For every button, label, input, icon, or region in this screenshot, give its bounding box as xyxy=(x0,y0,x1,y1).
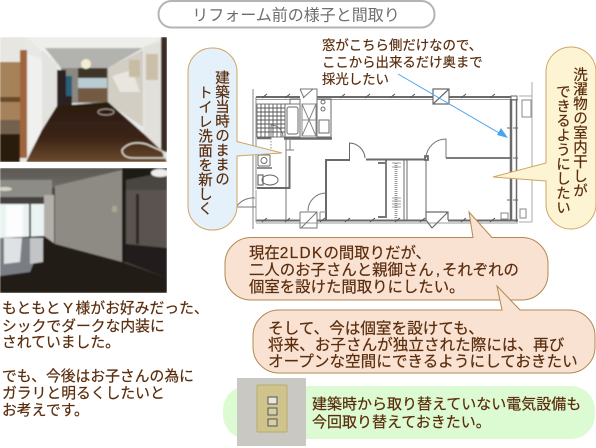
text block: description: ガラリと明るくしたいと xyxy=(2,385,165,402)
title xyxy=(158,1,434,28)
title: リフォーム前の様子と間取り xyxy=(192,6,400,24)
callout: indoor laundry drying xyxy=(493,47,596,229)
panel: electrical equipment note xyxy=(223,378,595,446)
callout: indoor laundry drying: 洗濯物の室内干しが xyxy=(571,67,587,198)
callout: future open space xyxy=(253,286,595,373)
callout: future open space: オープンな空間にできるようにしておきたい xyxy=(268,352,578,370)
outer walls xyxy=(256,97,518,220)
text block: description: もともとY様がお好みだった、 xyxy=(2,301,209,317)
rooms xyxy=(326,160,426,220)
callout: future open space: そして、今は個室を設けても、 xyxy=(268,320,484,338)
callout: indoor laundry drying: できるようにしたい xyxy=(554,84,570,214)
callout text: window xyxy=(322,38,486,87)
callout text: window: 窓がこちら側だけなので、 xyxy=(322,38,482,53)
callout: current 2LDK layout: 二人のお子さんと親御さん,それぞれの xyxy=(249,262,519,279)
callout: current 2LDK layout xyxy=(225,212,548,300)
callout: current 2LDK layout: 個室を設けた間取りにしたい。 xyxy=(249,278,464,296)
callout: current 2LDK layout: 現在2LDKの間取りだが、 xyxy=(249,245,431,262)
text block: description: シックでダークな内装に xyxy=(2,318,165,335)
callout: toilet and washroom: 建築当時のままの xyxy=(213,70,229,186)
text block: description xyxy=(2,300,213,419)
text block: description: でも、今後はお子さんの為に xyxy=(2,368,194,385)
photo: living room toward kitchen xyxy=(0,37,167,162)
text block: description: お考えです。 xyxy=(2,402,89,419)
photo: wall switch plate xyxy=(237,378,306,446)
callout: future open space: 将来、お子さんが独立された際には、再び xyxy=(268,336,565,354)
callout: toilet and washroom xyxy=(188,48,282,230)
callout text: window: 採光したい xyxy=(322,72,389,87)
panel: electrical equipment note: 建築時から取り替えていない電気設備も xyxy=(312,395,581,413)
panel: electrical equipment note: 今回取り替えておきたい。 xyxy=(312,414,491,431)
callout text: window: ここから出来るだけ奥まで xyxy=(322,55,483,70)
callout: toilet and washroom: トイレ洗面を新しく xyxy=(196,85,212,216)
wet rooms xyxy=(257,99,332,220)
text block: description: されていました。 xyxy=(2,334,120,351)
arrow: light from window xyxy=(398,74,508,138)
floor plan xyxy=(237,82,532,229)
photo: dark room with windows xyxy=(0,168,169,293)
